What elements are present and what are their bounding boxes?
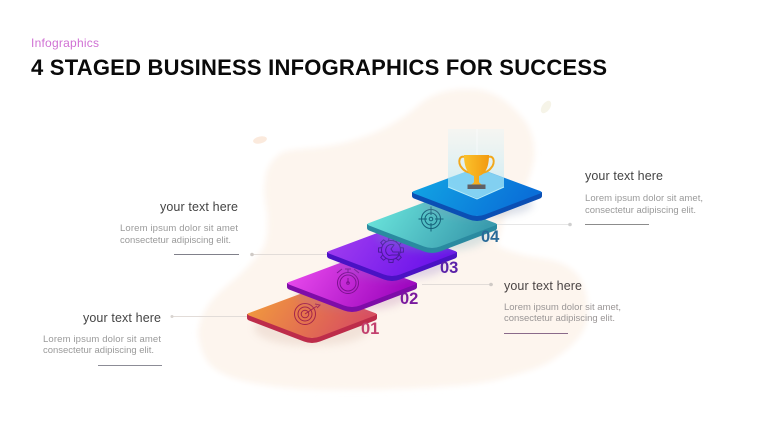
connector 04: [497, 223, 572, 226]
background blob: [198, 89, 588, 390]
callout: step 03 text: your text here: [160, 200, 238, 214]
step 2 plate: [287, 259, 417, 312]
section label: Infographics: [31, 36, 99, 50]
step 5 plate: [412, 168, 542, 221]
step 1 plate: [247, 290, 377, 346]
number 04: 04: [481, 228, 500, 246]
callout: step 03 text: Lorem ipsum dolor sit amet: [120, 223, 238, 234]
callout: step 04 text: Lorem ipsum dolor sit amet,: [585, 193, 703, 204]
callout: step 01 text: your text here: [83, 311, 161, 325]
title: 4 STAGED BUSINESS INFOGRAPHICS FOR SUCCESS: [31, 55, 607, 80]
blob speck left: [252, 135, 268, 145]
connector 01: [170, 315, 248, 318]
callout: step 02 text: your text here: [504, 279, 582, 293]
number 02: 02: [400, 290, 418, 308]
callout: step 03 text: consectetur adipiscing elit.: [120, 235, 231, 246]
callout: step 03 text: [120, 200, 239, 254]
callout: step 04 text: consectetur adipiscing elit.: [585, 205, 696, 216]
number 01: 01: [361, 320, 379, 338]
icon: stopwatch: [337, 269, 359, 294]
callout: step 02 text: consectetur adipiscing elit.: [504, 313, 615, 324]
callout: step 02 text: [504, 279, 621, 334]
blob speck right: [539, 99, 553, 115]
icon: gear: [378, 238, 404, 262]
icon: target: [294, 304, 320, 324]
step 3 plate: [327, 228, 457, 281]
callout: step 04 text: your text here: [585, 169, 663, 183]
callout: step 02 text: Lorem ipsum dolor sit amet,: [504, 302, 621, 313]
glass case: [448, 129, 504, 199]
icon: crosshair: [418, 206, 444, 232]
number 03: 03: [440, 259, 458, 277]
callout: step 01 text: consectetur adipiscing elit.: [43, 345, 154, 356]
callout: step 01 text: Lorem ipsum dolor sit amet: [43, 334, 161, 345]
callout: step 01 text: [43, 311, 162, 366]
connector 03: [250, 253, 328, 256]
callout: step 04 text: [585, 169, 703, 224]
icon: trophy: [459, 155, 494, 189]
step 4 plate: [367, 200, 497, 253]
connector 02: [422, 283, 493, 286]
